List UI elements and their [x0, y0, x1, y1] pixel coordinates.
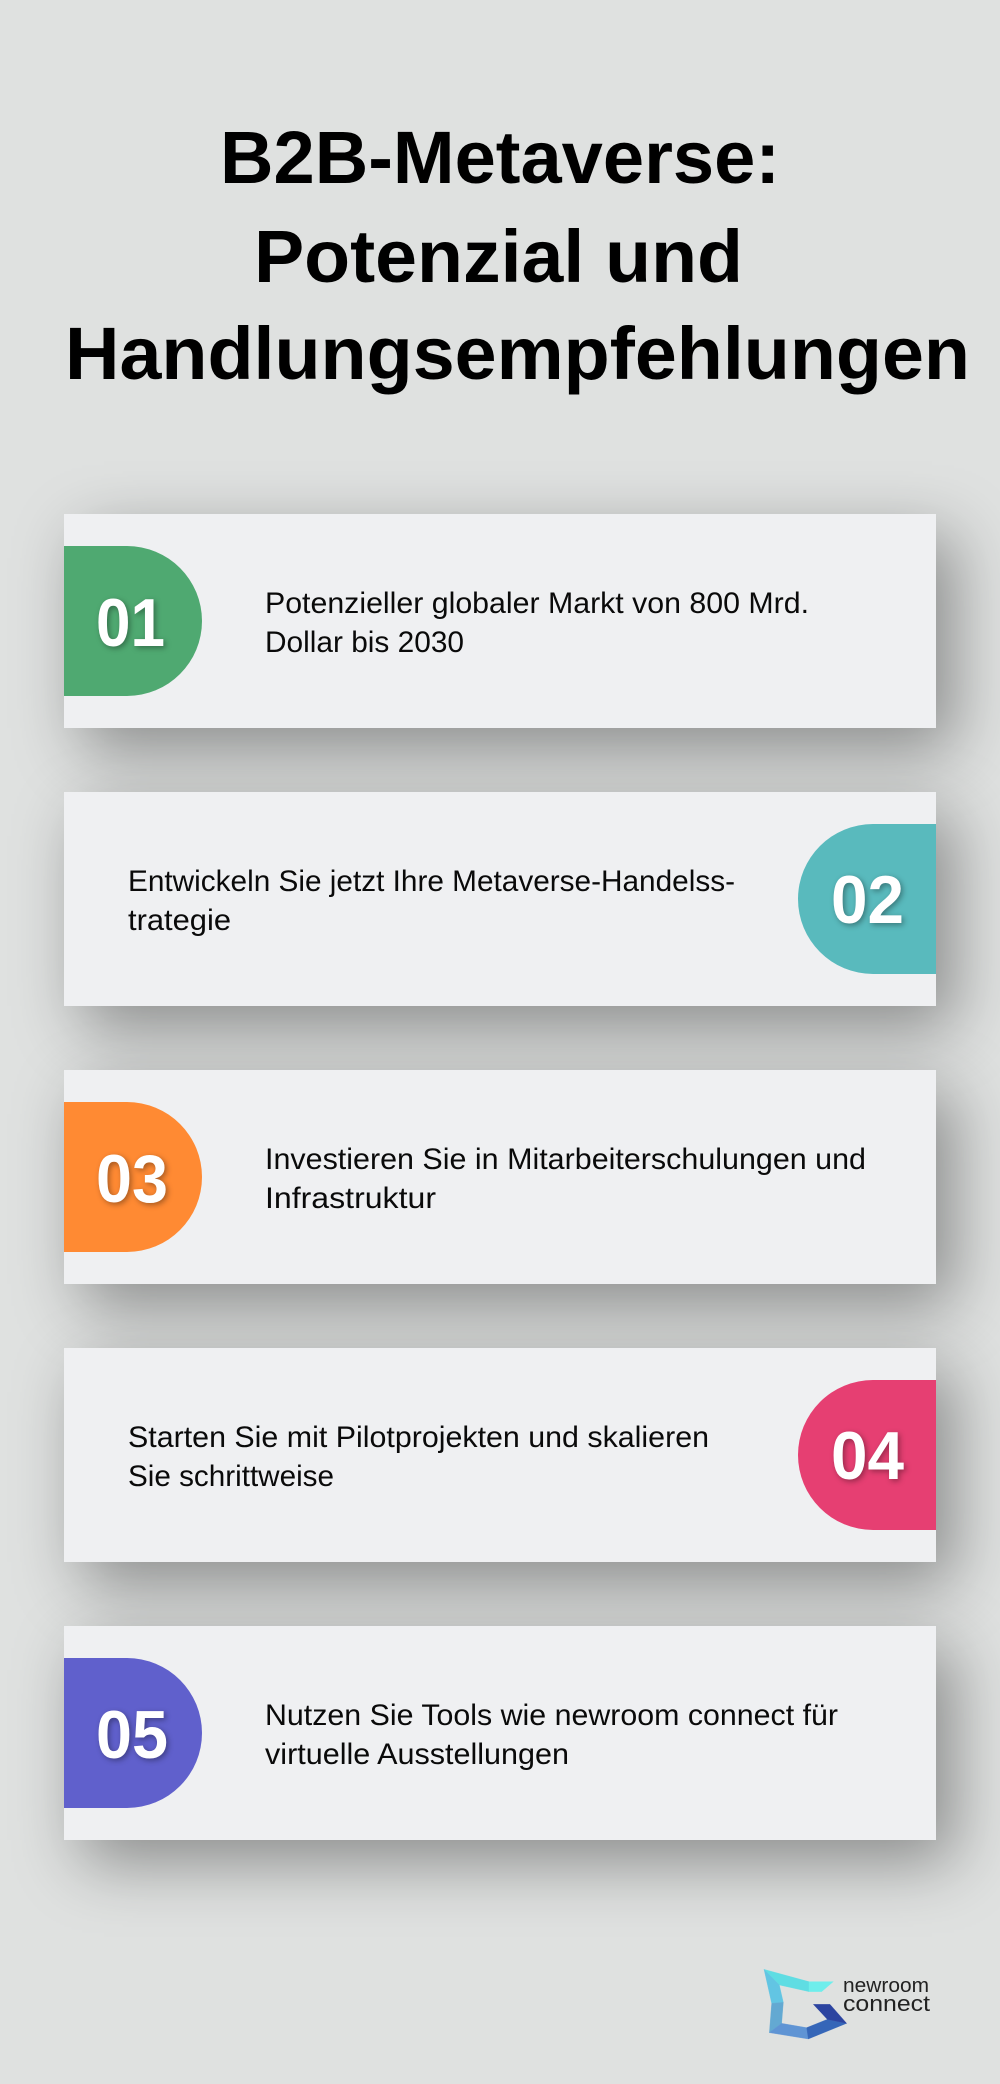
badge: 01	[64, 546, 202, 696]
badge: 03: 03	[96, 1141, 168, 1217]
text: step 01: Dollar bis 2030	[265, 626, 464, 659]
logo wordmark: connect	[843, 1991, 930, 2016]
panel: step 02	[64, 792, 936, 1006]
text: step 01: Potenzieller globaler Markt von 800 Mrd.	[265, 587, 809, 620]
text: step 02: Entwickeln Sie jetzt Ihre Metaverse-Handelss-	[128, 865, 735, 898]
title	[65, 116, 970, 395]
text: step 03: Investieren Sie in Mitarbeiterschulungen und	[265, 1143, 866, 1176]
text: step 01	[265, 587, 809, 659]
badge: 03	[64, 1102, 202, 1252]
badge: 02	[798, 824, 936, 974]
text: step 04: Sie schrittweise	[128, 1460, 334, 1493]
logo wordmark: newroom	[843, 1975, 929, 1997]
badge: 05: 05	[96, 1697, 168, 1773]
logo wordmark	[843, 1975, 930, 2016]
text: step 05	[265, 1699, 838, 1771]
badge: 02: 02	[831, 862, 904, 938]
text: step 05: Nutzen Sie Tools wie newroom connect für	[265, 1699, 838, 1732]
text: step 05: virtuelle Ausstellungen	[265, 1738, 569, 1771]
text: step 03: Infrastruktur	[265, 1182, 436, 1215]
panel: step 04	[64, 1348, 936, 1562]
text: step 04: Starten Sie mit Pilotprojekten und skalieren	[128, 1421, 709, 1454]
panel: step 01	[64, 514, 936, 728]
badge: 01: 01	[96, 585, 165, 661]
badge: 05	[64, 1658, 202, 1808]
title: B2B-Metaverse:	[220, 116, 780, 199]
icon: logo mark	[764, 1969, 847, 2039]
text: step 02	[128, 865, 735, 937]
panel: step 03	[64, 1070, 936, 1284]
title: Handlungsempfehlungen	[65, 312, 970, 395]
logo: newroom connect	[764, 1969, 930, 2040]
panel: step 05	[64, 1626, 936, 1840]
text: step 04	[128, 1421, 709, 1493]
text: step 03	[265, 1143, 866, 1215]
title: Potenzial und	[254, 215, 743, 298]
badge: 04	[798, 1380, 936, 1530]
badge: 04: 04	[831, 1418, 904, 1494]
text: step 02: trategie	[128, 904, 231, 937]
